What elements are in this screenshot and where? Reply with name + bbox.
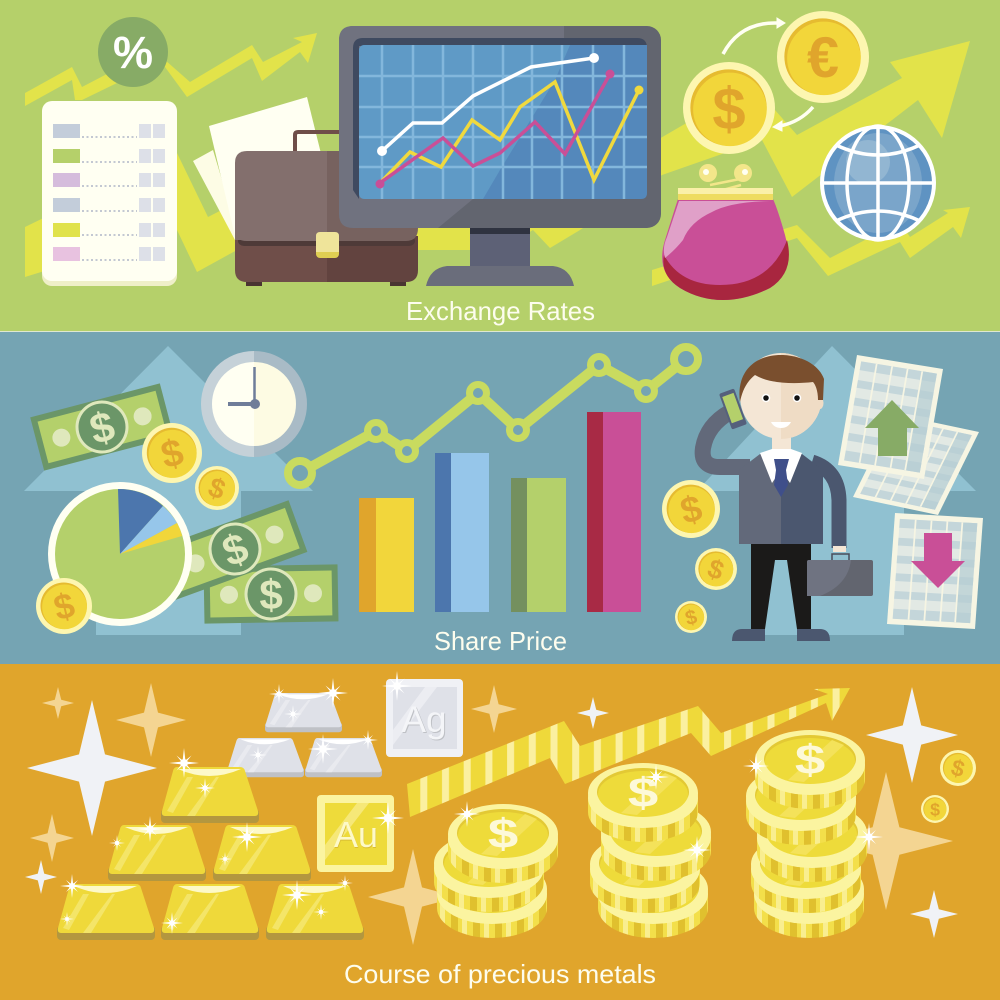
- icon: dollar coin: $: [712, 75, 746, 142]
- banknote lower: $: [259, 571, 283, 618]
- papers behind briefcase: [193, 97, 330, 240]
- icon: percent badge: %: [113, 27, 153, 78]
- icon: purse: [662, 164, 789, 300]
- coin stack three: $: [795, 737, 825, 783]
- coin stack one: $: [488, 811, 518, 857]
- coin: $: [704, 553, 728, 586]
- arrow: big zigzag across panel: [25, 41, 970, 277]
- icon: globe: [820, 125, 936, 241]
- coin: [662, 480, 720, 538]
- small coin: [921, 795, 949, 823]
- house arrow left: [24, 346, 313, 635]
- chart line: pink: [376, 70, 614, 188]
- element tile: gold: Au: [334, 814, 378, 855]
- small coin: $: [930, 799, 940, 819]
- coin: [195, 466, 239, 510]
- bar: green: [511, 478, 566, 612]
- small coin: $: [948, 754, 968, 782]
- banknote top left: $: [85, 402, 119, 453]
- heading: exchange rates: Exchange Rates: [406, 296, 595, 326]
- icon: euro coin: [777, 11, 869, 103]
- stars: peach: [30, 683, 953, 945]
- coin: [695, 548, 737, 590]
- arrow: small zigzag top left: [25, 33, 317, 106]
- element tile: gold: [317, 795, 394, 872]
- heading: share price: Share Price: [434, 626, 567, 656]
- panel: exchange rates: [0, 0, 1000, 331]
- small briefcase: [807, 554, 873, 596]
- chart line: yellow: [380, 82, 644, 183]
- coin: [142, 423, 202, 483]
- small coin: [940, 750, 976, 786]
- monitor with line chart: [339, 26, 661, 286]
- bar: magenta: [587, 412, 641, 612]
- icon: dollar coin: [683, 62, 775, 154]
- businessman: [703, 353, 873, 641]
- coin: $: [157, 432, 188, 477]
- report sheet behind: [853, 414, 979, 515]
- panel: course of precious metals: [0, 664, 1000, 1000]
- silver bars: [227, 693, 382, 777]
- report sheet: up: [838, 355, 943, 479]
- banknote middle: [155, 500, 307, 600]
- element tile: silver: Ag: [402, 700, 448, 741]
- banknote top left: [30, 383, 174, 471]
- coin stack two: [588, 763, 711, 938]
- stars: white: [25, 687, 958, 938]
- line chart: [288, 347, 698, 485]
- element tile: silver: Ag: [401, 699, 447, 740]
- sparkles: [60, 671, 883, 934]
- coin: $: [50, 585, 79, 628]
- banknote middle: $: [216, 523, 254, 576]
- divider line: [0, 331, 1000, 332]
- bar: blue: [435, 453, 489, 612]
- pie chart: [48, 482, 192, 626]
- icon: euro coin: €: [807, 26, 839, 90]
- arrow: striped rising: [407, 688, 850, 817]
- element tile: gold: Au: [334, 815, 379, 856]
- icon: clock: [201, 351, 307, 457]
- coin: $: [683, 606, 700, 630]
- coin stack one: [434, 804, 558, 938]
- house arrow right: [697, 346, 976, 635]
- coin: $: [204, 471, 230, 506]
- icon: percent badge: [98, 17, 168, 87]
- coin: $: [676, 487, 706, 532]
- heading: course of precious metals: Course of precious metals: [344, 959, 656, 989]
- report sheet: down: [887, 513, 983, 629]
- icon: briefcase: [235, 132, 418, 286]
- phone: [719, 388, 747, 430]
- monitor stand: [426, 228, 574, 286]
- arrow: small zigzag lower right: [652, 207, 970, 286]
- coin stack two: $: [628, 770, 658, 816]
- banknote lower: [204, 564, 338, 624]
- bar: yellow: [359, 498, 414, 612]
- chart line: white: [377, 53, 599, 156]
- document: rates list: [42, 101, 177, 286]
- gold bars: [57, 767, 364, 940]
- coin stack three: [746, 730, 867, 938]
- element tile: silver: [386, 679, 463, 757]
- coin: [36, 578, 92, 634]
- arrow: dollar to euro: [723, 18, 785, 54]
- panel: share price: [0, 332, 1000, 664]
- arrow: euro to dollar: [773, 107, 813, 131]
- coin: [675, 601, 707, 633]
